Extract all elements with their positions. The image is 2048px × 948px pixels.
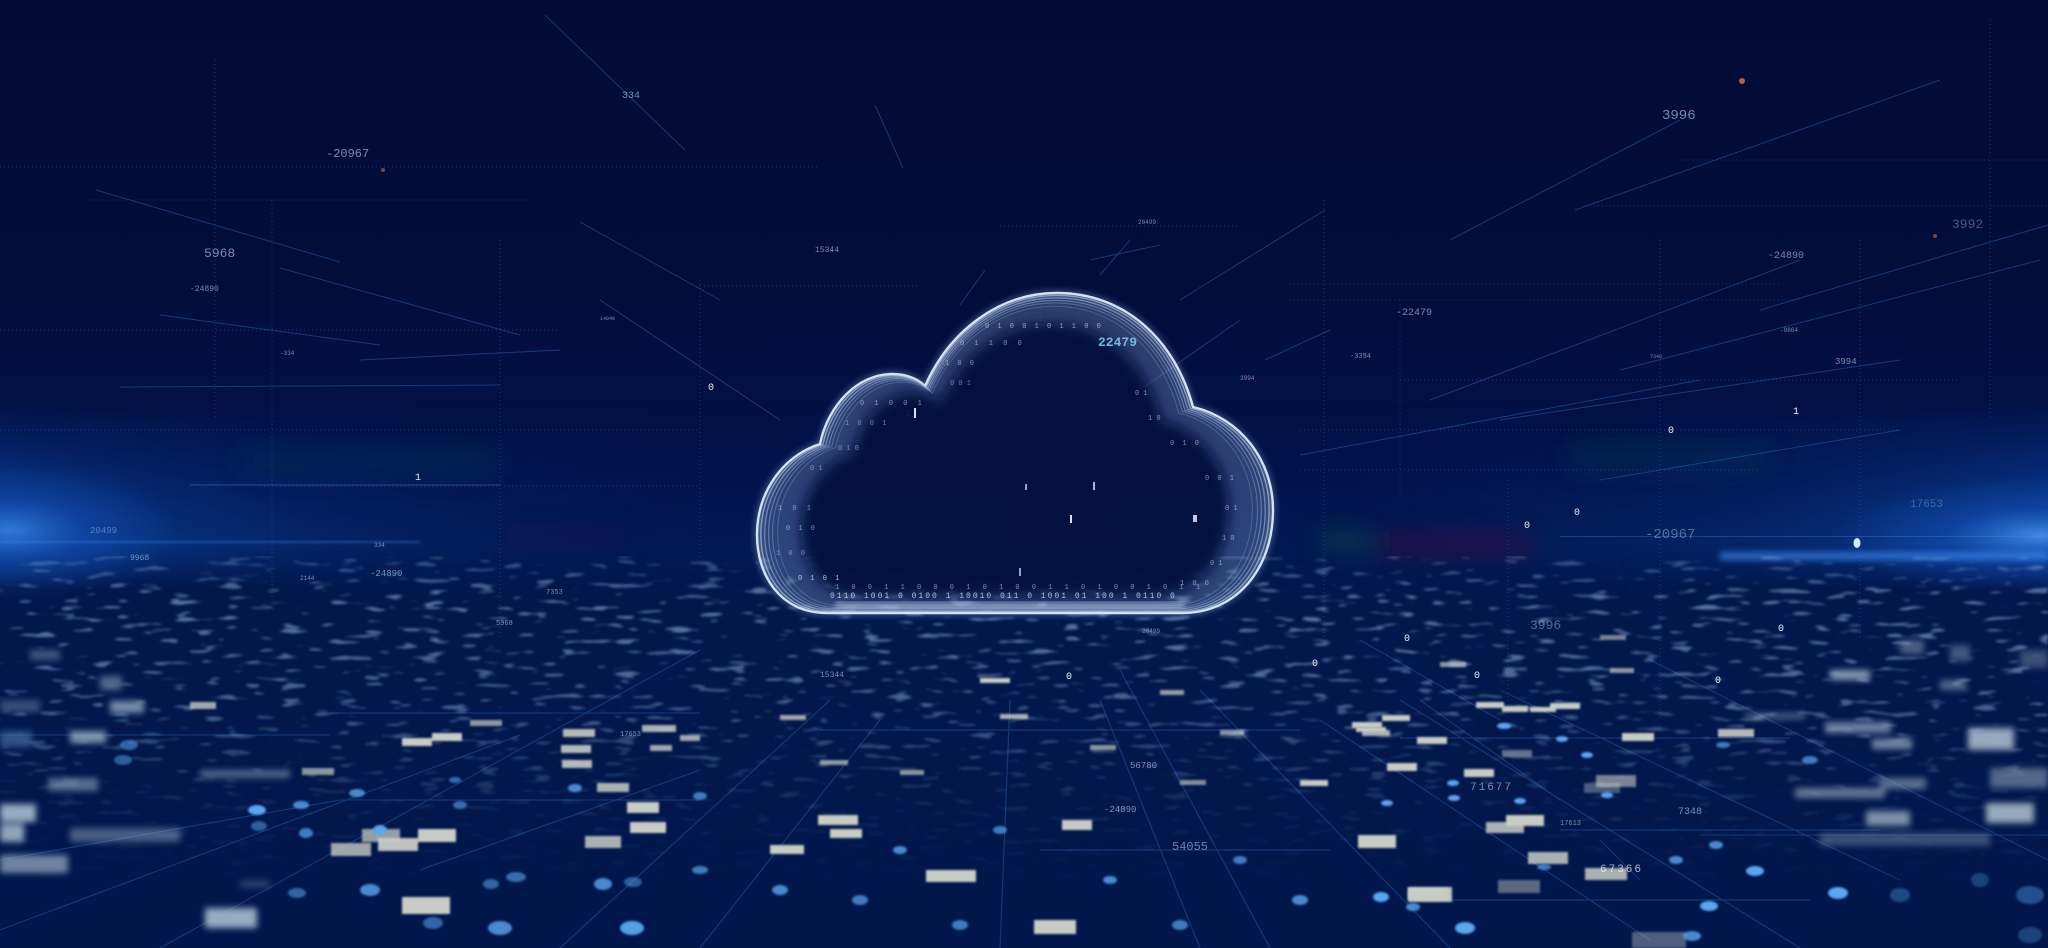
cloud glass rim fill xyxy=(757,293,1273,613)
blurred foreground blocks, right xyxy=(1745,640,2048,846)
floating binary digits: 0 xyxy=(1312,659,1318,670)
sharp data blocks, left and centre xyxy=(190,678,1448,934)
floating numeric data labels: -24890 xyxy=(190,285,219,294)
cloud binary digits: 0 1 0 1 xyxy=(798,575,841,583)
floating binary digits: 0 xyxy=(1715,676,1721,687)
dotted sky grid xyxy=(0,20,2048,720)
floating numeric data labels: 15344 xyxy=(815,246,839,255)
blurred foreground blocks, left xyxy=(0,650,290,928)
floating binary digits: 0 xyxy=(1524,521,1530,532)
floating numeric data labels: -20967 xyxy=(1645,527,1695,543)
cloud outer glow xyxy=(757,293,1273,613)
floating numeric data labels: 3996 xyxy=(1530,618,1561,633)
floating numeric data labels: 54055 xyxy=(1172,840,1208,854)
cloud binary digits: 1 0 0 xyxy=(1180,580,1211,588)
cloud layered rim xyxy=(757,293,1273,613)
floating numeric data labels: 3992 xyxy=(1952,217,1983,232)
floating numeric data labels: -3394 xyxy=(1350,353,1371,361)
cloud binary digits: 1 0 xyxy=(1148,415,1161,423)
floating numeric data labels: 334 xyxy=(374,542,385,549)
distant data blocks texture xyxy=(0,556,2048,842)
cloud binary digits: 1 0 0 xyxy=(945,360,976,368)
floating binary digits xyxy=(415,383,1799,687)
blue indicator dots xyxy=(114,723,2044,943)
cloud binary digits: 0 1 xyxy=(1135,390,1148,398)
cloud binary digits: 0 0 1 xyxy=(1205,475,1236,483)
floating numeric data labels: 5968 xyxy=(204,246,235,261)
floating binary digits: 0 xyxy=(1574,508,1580,519)
horizon glow band xyxy=(0,400,2048,590)
left lens flare xyxy=(0,460,180,600)
cloud binary digits: 0 1 0 xyxy=(838,445,859,453)
cloud binary digits xyxy=(776,323,1238,601)
floating numeric data labels: -24890 xyxy=(1104,805,1136,815)
floating numeric data labels: -24890 xyxy=(1768,251,1804,262)
floating numeric data labels: 71677 xyxy=(1470,782,1513,794)
cloud binary digits: 0 1 1 0 0 xyxy=(960,340,1025,348)
floating numeric data labels: -24890 xyxy=(370,569,402,579)
cloud xyxy=(757,293,1273,613)
bright marker dot on right horizon xyxy=(1854,538,1860,548)
floating numeric data labels: 17613 xyxy=(1560,820,1581,828)
horizon light streaks xyxy=(0,484,2048,560)
cloud binary digits: 1 0 0 xyxy=(776,550,807,558)
floating numeric data labels xyxy=(90,91,1983,876)
cloud highlighted number: 22479 xyxy=(1098,335,1137,350)
floating binary digits: 0 xyxy=(1404,634,1410,645)
coloured haze smudges behind the horizon xyxy=(240,444,1770,555)
cloud binary digits: 0110 1001 0 0100 1 10010 011 0 1001 01 100 1 0110 0 xyxy=(830,592,1177,601)
floating numeric data labels: 15344 xyxy=(820,671,844,680)
cloud interior sparks xyxy=(914,408,1197,576)
floating binary digits: 0 xyxy=(708,383,714,394)
floating numeric data labels: 334 xyxy=(622,91,640,102)
cloud binary digits: 0 1 xyxy=(1225,505,1238,513)
cloud binary digits: 0 1 0 0 1 xyxy=(860,400,925,408)
cloud binary digits: 0 1 xyxy=(810,465,823,473)
floating numeric data labels: 5968 xyxy=(496,620,513,628)
floating binary digits: 0 xyxy=(1066,672,1072,683)
cloud binary digits: 1 0 0 1 xyxy=(845,420,888,428)
floating numeric data labels: 17653 xyxy=(1910,499,1943,511)
cloud binary digits: 1 0 1 xyxy=(778,505,814,513)
floating binary digits: 1 xyxy=(415,473,421,484)
cloud binary digits: 1 0 xyxy=(1222,535,1235,543)
floating numeric data labels: -20967 xyxy=(326,147,369,161)
floating binary digits: 0 xyxy=(1668,426,1674,437)
red accent sparks xyxy=(381,78,1937,238)
floating numeric data labels: -9864 xyxy=(1780,327,1798,334)
floating numeric data labels: 7348 xyxy=(1678,807,1702,818)
floating numeric data labels: 7348 xyxy=(1650,354,1662,360)
floating numeric data labels: -22479 xyxy=(1396,308,1432,319)
cloud binary digits: 1 0 0 1 1 0 0 0 1 0 1 0 0 1 1 0 1 0 0 1 0 1 1 xyxy=(835,584,1204,592)
cloud base glow xyxy=(835,602,1185,608)
right lens flare xyxy=(1830,475,2048,595)
floating numeric data labels: 17653 xyxy=(620,731,641,739)
floating numeric data labels: 67366 xyxy=(1600,864,1643,876)
floating numeric data labels: 9968 xyxy=(130,554,149,563)
floating numeric data labels: 3994 xyxy=(1240,375,1255,382)
floating binary digits: 1 xyxy=(905,409,911,420)
cloud binary digits: 0 1 0 xyxy=(1170,440,1201,448)
floating binary digits: 0 xyxy=(1474,671,1480,682)
cloud binary digits: 0 1 xyxy=(1210,560,1223,568)
floating numeric data labels: 3996 xyxy=(1662,108,1696,124)
floating numeric data labels: 20499 xyxy=(1142,628,1160,635)
sharp data blocks, right xyxy=(1352,635,1754,948)
floating binary digits: 1 xyxy=(1793,407,1799,418)
floating numeric data labels: 7353 xyxy=(546,589,563,597)
floating numeric data labels: 14840 xyxy=(600,316,615,322)
floating numeric data labels: 2144 xyxy=(300,575,315,582)
cloud binary digits: 0 1 0 0 1 0 1 1 0 0 xyxy=(985,323,1103,331)
floating binary digits: 0 xyxy=(1778,624,1784,635)
floating numeric data labels: 3994 xyxy=(1835,357,1857,367)
floor perspective lines xyxy=(0,640,2048,948)
floating numeric data labels: 20499 xyxy=(1138,219,1156,226)
sky data rays xyxy=(96,15,2048,480)
cloud binary digits: 0 0 1 xyxy=(950,380,971,388)
cloud binary digits: 0 1 0 xyxy=(786,525,817,533)
floating numeric data labels: 56780 xyxy=(1130,761,1157,771)
cloud dark interior xyxy=(801,323,1229,597)
floating numeric data labels: 20499 xyxy=(90,526,117,536)
floating numeric data labels: -334 xyxy=(280,350,295,357)
